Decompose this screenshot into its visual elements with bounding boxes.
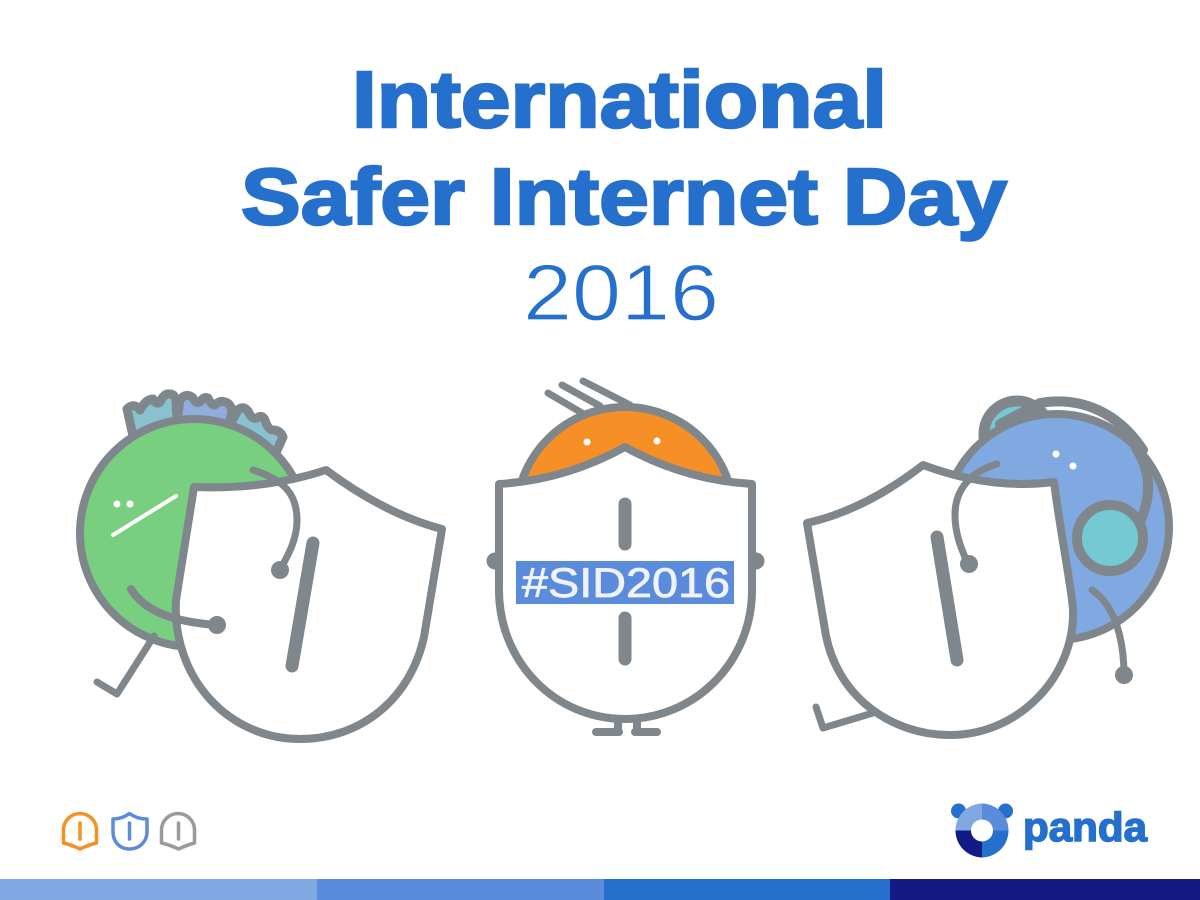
character: blue with headphones and shield [807, 401, 1169, 735]
title [241, 55, 1008, 337]
shield [499, 447, 752, 719]
shield bar lower [618, 618, 632, 659]
arm right [1092, 590, 1124, 675]
ear cup [1077, 505, 1143, 571]
title line: Safer Internet Day: Safer Internet Day [241, 152, 1008, 241]
hashtag label: #SID2016 [522, 559, 730, 606]
ears [486, 552, 764, 570]
shield [176, 470, 442, 739]
eyes [1052, 450, 1076, 470]
head [516, 407, 734, 625]
eyes [584, 438, 660, 446]
icon: orange shield [64, 814, 96, 849]
bottom colour band [0, 879, 1200, 900]
panda logo [951, 804, 1148, 858]
arm upper [253, 470, 297, 570]
logo wordmark: panda [1023, 804, 1148, 850]
character: green with shield [80, 394, 442, 739]
leg [97, 636, 154, 694]
headphone back cup [984, 401, 1050, 467]
character: orange with shield [486, 381, 764, 732]
leg [816, 707, 873, 728]
hand lower [208, 616, 226, 634]
shield [807, 465, 1073, 735]
icon: grey shield [162, 814, 194, 849]
shield bar [292, 543, 313, 666]
arm lower [131, 589, 217, 625]
feet [596, 722, 657, 732]
headband [1000, 401, 1143, 450]
head [943, 414, 1169, 640]
title line: International: International [352, 55, 887, 144]
hand left [960, 555, 978, 573]
icon: blue shield [113, 814, 147, 849]
title line: 2016: 2016 [523, 248, 719, 337]
hand right [1115, 666, 1133, 684]
headband front [1136, 448, 1148, 522]
head [80, 419, 308, 647]
shield bar upper [618, 504, 632, 544]
logo mark [951, 804, 1013, 858]
face [113, 496, 176, 535]
shield bar [937, 537, 957, 660]
hair tufts [127, 394, 283, 455]
arm left [955, 464, 997, 562]
hair lines [548, 381, 630, 413]
hand upper [271, 561, 289, 579]
small shield icons [64, 814, 194, 849]
